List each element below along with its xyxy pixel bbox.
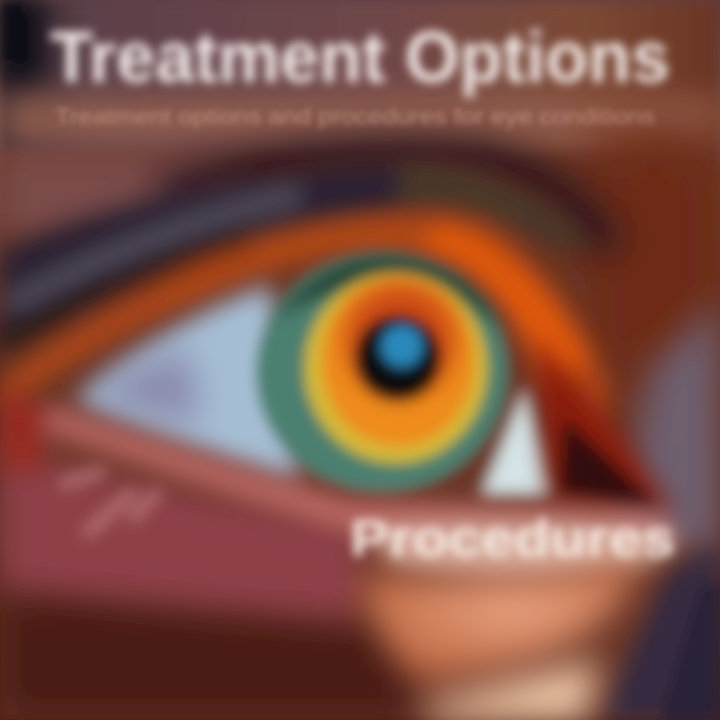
inner corner: dark red bbox=[535, 340, 672, 510]
upper lid: orange rim bbox=[0, 215, 610, 440]
eyelid crease: dark arc bbox=[160, 152, 610, 250]
lash highlights bbox=[60, 470, 160, 535]
pupil bbox=[356, 316, 440, 400]
caption: Procedures bbox=[350, 510, 675, 568]
title: Treatment Options bbox=[50, 18, 670, 98]
cheek highlights bbox=[360, 560, 640, 720]
eyelashes: dark band bbox=[0, 165, 590, 355]
lower lid: pink rim bbox=[0, 385, 680, 578]
iris bbox=[256, 252, 508, 492]
subtitle: Treatment options and procedures for eye conditions bbox=[55, 104, 655, 129]
sclera: pale blue white bbox=[75, 285, 300, 480]
